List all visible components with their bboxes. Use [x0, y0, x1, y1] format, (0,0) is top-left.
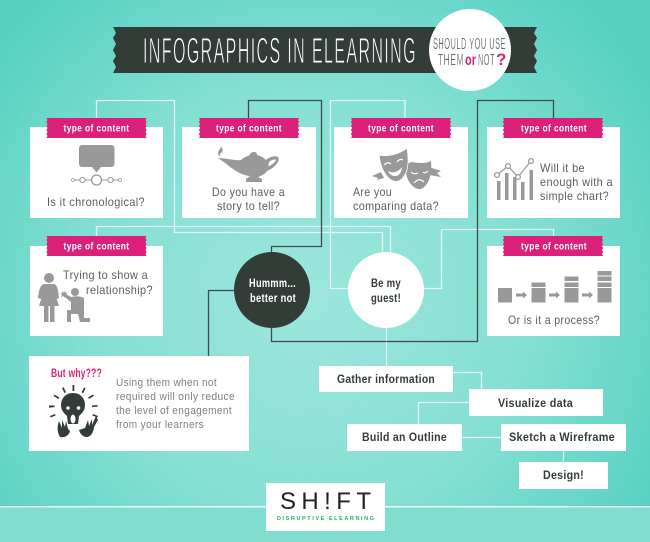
card: process — [487, 236, 620, 336]
panel: but why — [29, 356, 249, 451]
body text: the level of engagement — [116, 405, 232, 417]
card: simple chart: Will it be — [540, 161, 585, 175]
step: gather information — [319, 366, 453, 392]
subtitle circle — [429, 9, 511, 91]
card: simple chart — [487, 118, 620, 218]
ribbon: type of content — [64, 240, 130, 252]
icon: screaming face — [49, 385, 98, 437]
card: story: story to tell? — [217, 199, 280, 213]
subtitle circle: ? — [496, 50, 506, 69]
card: story: Do you have a — [212, 185, 285, 199]
subtitle circle: or — [465, 52, 476, 69]
subtitle circle: NOT — [478, 52, 495, 69]
step: build an outline: Build an Outline — [362, 432, 447, 444]
card: relationship: relationship? — [86, 283, 153, 297]
step: visualize data — [469, 389, 603, 416]
ribbon: type of content — [521, 240, 587, 252]
card: comparing: Are you — [353, 185, 392, 199]
icon: genie lamp — [218, 143, 279, 182]
body text: from your learners — [116, 419, 204, 431]
card: story — [182, 118, 316, 218]
logo: shift: SH!FT — [280, 488, 371, 515]
dark circle: better not: better not — [250, 293, 296, 305]
card: process: Or is it a process? — [508, 313, 600, 327]
connector lines: dark — [208, 100, 554, 356]
ribbon: type of content — [64, 122, 130, 134]
icon: speech bubble timeline — [72, 145, 122, 185]
connector lines: white — [96, 100, 564, 462]
card: simple chart: enough with a — [540, 175, 613, 189]
step: sketch a wireframe: Sketch a Wireframe — [509, 432, 615, 444]
white circle: be my guest: guest! — [371, 293, 401, 305]
icon: chart — [495, 159, 533, 200]
step: visualize data: Visualize data — [498, 398, 573, 410]
ribbon: type of content — [216, 122, 282, 134]
card: comparing: comparing data? — [353, 199, 439, 213]
card: relationship: Trying to show a — [63, 268, 148, 282]
card: comparing — [334, 118, 468, 218]
icon: process blocks — [498, 271, 612, 302]
white circle: be my guest — [348, 252, 424, 328]
white circle: be my guest: Be my — [371, 278, 401, 290]
icon: theatre masks — [372, 148, 441, 189]
dark circle: better not: Hummm... — [249, 278, 296, 290]
step: build an outline — [347, 424, 462, 451]
step: design — [519, 462, 608, 489]
body text: Using them when not — [116, 377, 217, 389]
ribbon: type of content — [368, 122, 434, 134]
dark circle: better not — [234, 252, 310, 328]
ribbon: type of content — [521, 122, 587, 134]
body text — [116, 377, 235, 431]
subtitle circle: THEM — [438, 52, 464, 69]
card: chronological: Is it chronological? — [47, 195, 145, 209]
logo: shift — [266, 483, 385, 531]
card: chronological — [30, 118, 163, 218]
card: relationship — [30, 236, 163, 336]
logo: shift: DISRUPTIVE ELEARNING — [277, 516, 374, 522]
text: SHOULD YOU USE — [433, 36, 506, 53]
step: design: Design! — [543, 470, 584, 482]
step: sketch a wireframe — [501, 424, 626, 451]
card: simple chart: simple chart? — [540, 189, 609, 203]
heading: but why: But why??? — [51, 368, 102, 380]
title banner — [113, 27, 537, 73]
icon: couple proposal — [38, 273, 90, 322]
body text: required will only reduce — [116, 391, 235, 403]
step: gather information: Gather information — [337, 374, 435, 386]
